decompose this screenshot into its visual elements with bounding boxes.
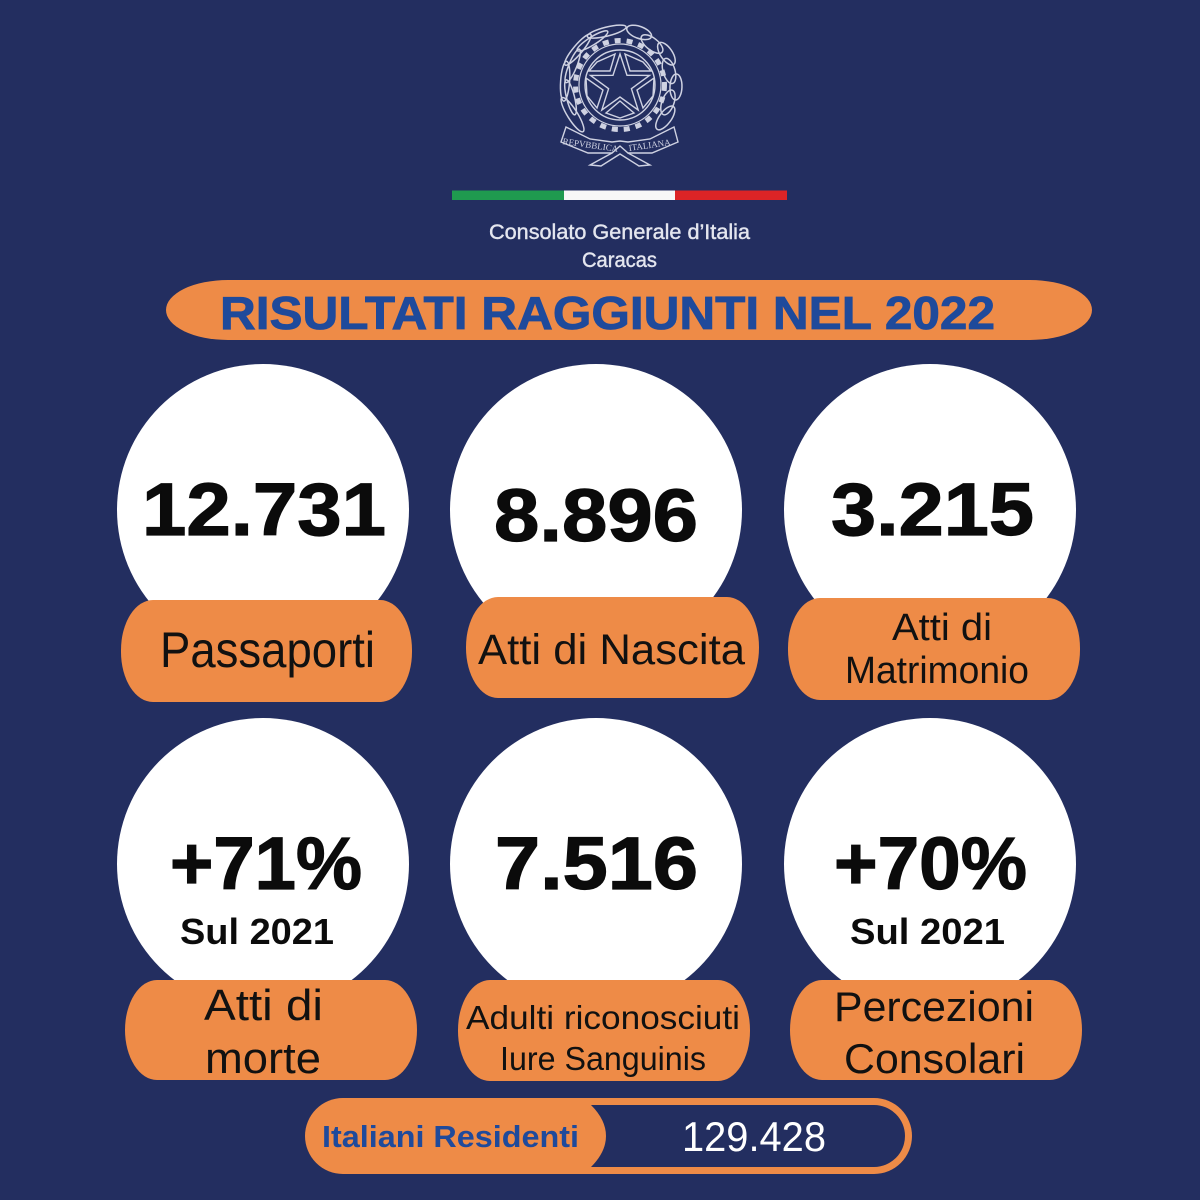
- consulate name: Caracas: [582, 249, 657, 272]
- panel: atti di morte: [117, 718, 417, 1083]
- panel: atti di morte: Atti di: [204, 981, 323, 1030]
- panel: atti di matrimonio: 3.215: [831, 468, 1034, 551]
- icon: emblem of the Italian Republic: REPVBBLICA: [562, 136, 619, 154]
- panel: italiani residenti: [305, 1098, 912, 1174]
- panel: passaporti: 12.731: [142, 468, 386, 551]
- panel: italiani residenti: Italiani Residenti: [322, 1119, 579, 1154]
- panel: percezioni consolari: Consolari: [844, 1035, 1025, 1082]
- panel: percezioni consolari: [784, 718, 1082, 1082]
- panel: italiani residenti: 129.428: [682, 1113, 826, 1160]
- panel: atti di morte: morte: [205, 1034, 321, 1083]
- title banner: [166, 280, 1092, 340]
- panel: atti di matrimonio: Atti di: [892, 607, 992, 649]
- panel: atti di nascita: Atti di Nascita: [478, 626, 745, 674]
- panel: adulti riconosciuti iure sanguinis: [450, 718, 750, 1081]
- panel: adulti riconosciuti iure sanguinis: Iure Sanguinis: [500, 1040, 706, 1077]
- panel: atti di nascita: [450, 364, 759, 698]
- panel: adulti riconosciuti iure sanguinis: Adulti riconosciuti: [466, 999, 740, 1036]
- panel: passaporti: Passaporti: [160, 622, 375, 678]
- icon: emblem of the Italian Republic: [558, 22, 682, 166]
- panel: atti di morte: +71%: [170, 822, 362, 905]
- consulate name: [489, 221, 750, 272]
- icon: emblem of the Italian Republic: ITALIANA: [628, 137, 672, 153]
- panel: passaporti: [117, 364, 412, 702]
- consulate name: Consolato Generale d’Italia: [489, 221, 750, 244]
- panel: atti di nascita: 8.896: [494, 474, 698, 557]
- panel: percezioni consolari: Sul 2021: [850, 911, 1005, 952]
- tricolour bar: [452, 190, 787, 200]
- title banner: RISULTATI RAGGIUNTI NEL 2022: [220, 287, 995, 339]
- panel: atti di matrimonio: [784, 364, 1080, 700]
- panel: atti di morte: Sul 2021: [180, 911, 334, 952]
- panel: percezioni consolari: +70%: [834, 822, 1027, 905]
- panel: percezioni consolari: Percezioni: [834, 983, 1034, 1030]
- panel: atti di matrimonio: Matrimonio: [845, 650, 1029, 692]
- panel: adulti riconosciuti iure sanguinis: 7.516: [495, 822, 698, 905]
